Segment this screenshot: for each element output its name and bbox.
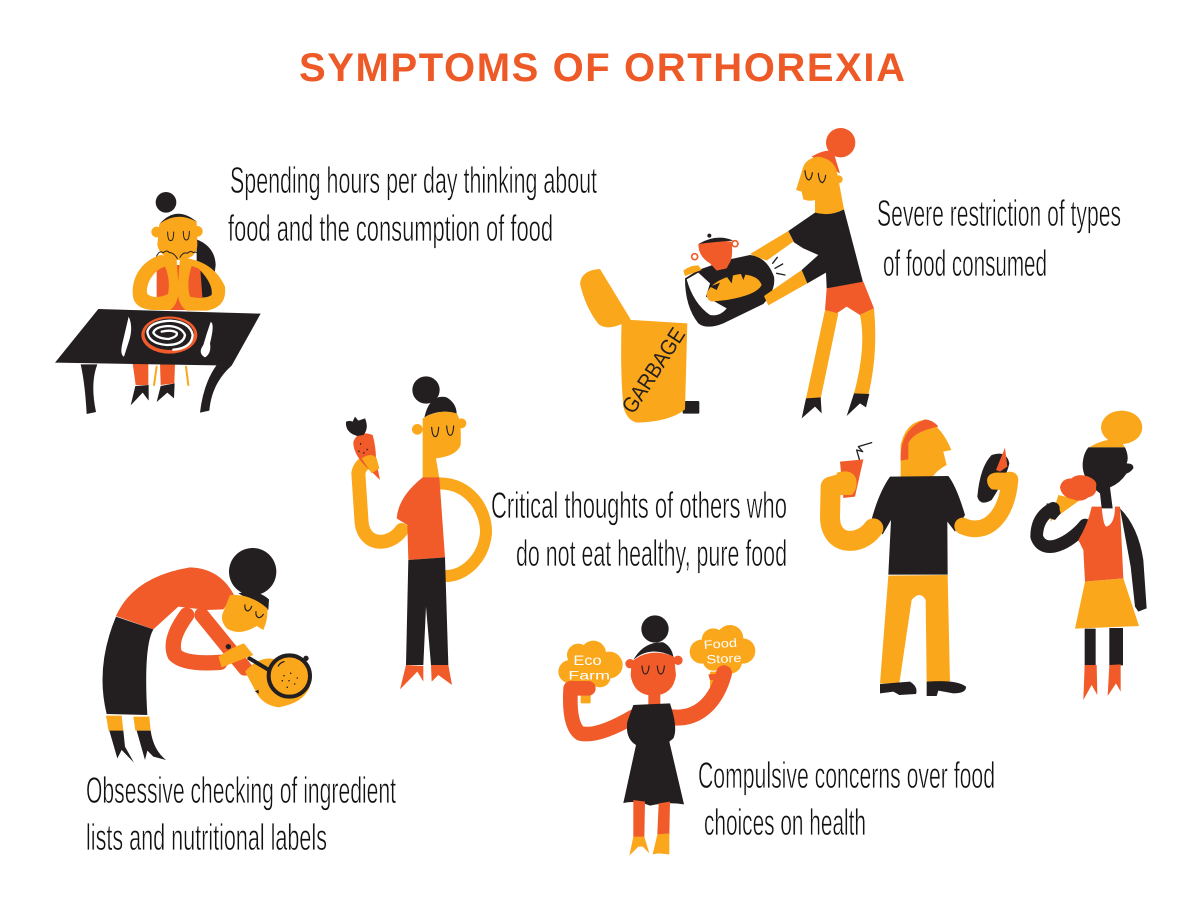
illustration: woman inspecting food with magnifier [102, 548, 310, 763]
icon: eco farm broccoli [558, 641, 623, 703]
icon: food store broccoli [690, 625, 755, 688]
text: critical thoughts: do not eat healthy, pure food [516, 533, 787, 574]
illustration: woman holding carrot [346, 376, 486, 689]
text: hours thinking about food [228, 160, 597, 249]
text: critical thoughts: Critical thoughts of others who [491, 485, 787, 526]
panel: hours thinking about food [55, 160, 597, 414]
illustration: man with drink and hot dog [830, 419, 1018, 696]
panel: man and woman with snacks [830, 411, 1147, 700]
panel: compulsive concerns [558, 615, 995, 856]
text: hours thinking about food: food and the consumption of food [228, 208, 553, 249]
illustration: woman throwing food into garbage bin [580, 128, 875, 423]
text: compulsive concerns [698, 755, 995, 843]
illustration: woman with ice cream [1037, 411, 1147, 700]
text: severe restriction [877, 193, 1121, 284]
icon: carrot [346, 417, 380, 480]
icon: eco farm broccoli: Eco [573, 652, 602, 668]
panel: critical thoughts of others [346, 376, 787, 689]
illustration: woman at table with plate [55, 192, 261, 414]
illustration: woman choosing eco farm or food store [558, 615, 755, 856]
text: severe restriction: of food consumed [883, 243, 1047, 284]
text: critical thoughts [491, 485, 787, 574]
text: obsessive checking [86, 770, 396, 858]
icon: eco farm broccoli: Farm [568, 669, 610, 683]
icon: food store broccoli: Store [706, 651, 742, 667]
text: obsessive checking: lists and nutritional labels [86, 817, 327, 858]
icon: food store broccoli: Food [703, 636, 737, 652]
panel: severe restriction [580, 128, 1121, 423]
text: compulsive concerns: choices on health [704, 802, 866, 843]
text: hours thinking about food: Spending hours per day thinking about [230, 160, 597, 201]
panel: obsessive checking [86, 548, 396, 858]
title: SYMPTOMS OF ORTHOREXIA [299, 46, 905, 90]
icon: garbage bin: GARBAGE [617, 323, 690, 418]
text: obsessive checking: Obsessive checking of ingredient [86, 770, 396, 811]
icon: garbage bin [580, 269, 699, 423]
